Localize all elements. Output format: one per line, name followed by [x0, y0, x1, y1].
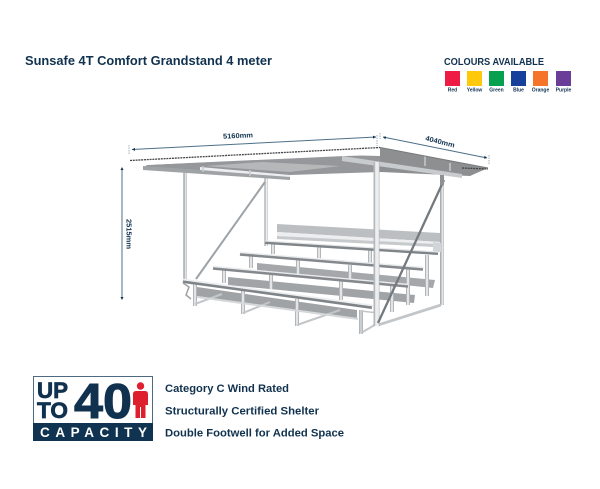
title: Sunsafe 4T Comfort Grandstand 4 meter	[25, 53, 272, 68]
base struts	[195, 294, 441, 333]
feature list	[165, 383, 344, 440]
swatch: orange: Orange	[532, 88, 549, 94]
dimension: depth 4040mm	[380, 133, 489, 165]
back frame posts and braces	[185, 172, 442, 305]
roof beams	[143, 156, 462, 180]
up: UP	[37, 378, 68, 403]
icon: person	[133, 382, 148, 418]
dimension: height 2515mm	[120, 167, 132, 300]
dimension: height 2515mm: 2515mm	[124, 219, 132, 249]
swatch: red: Red	[448, 88, 457, 94]
feature 2: Structurally Certified Shelter	[165, 406, 320, 418]
foot hardware	[183, 283, 191, 299]
roof sheet	[130, 147, 488, 169]
swatch: yellow: Yellow	[467, 88, 482, 94]
number 40: 40	[74, 375, 132, 429]
dimension: width 5160mm: 5160mm	[223, 132, 253, 141]
grandstand illustration	[130, 147, 488, 334]
swatch: purple: Purple	[556, 88, 571, 94]
feature 1: Category C Wind Rated	[165, 383, 289, 395]
to: TO	[37, 398, 68, 423]
dimension: width 5160mm	[129, 132, 377, 155]
swatch: blue: Blue	[513, 88, 524, 94]
bench legs and struts	[195, 243, 427, 334]
backrest	[277, 224, 441, 252]
dimension: depth 4040mm: 4040mm	[424, 135, 455, 150]
front posts and braces	[376, 162, 444, 326]
badge band	[33, 423, 153, 441]
roof underside	[143, 148, 488, 176]
colours available legend	[444, 57, 571, 94]
capacity badge	[33, 375, 153, 441]
feature 3: Double Footwell for Added Space	[165, 428, 344, 440]
seat rails	[183, 241, 438, 319]
capacity label: CAPACITY	[40, 425, 147, 440]
swatch: green: Green	[489, 88, 504, 94]
footboards	[197, 263, 435, 318]
bench leg highlights	[195, 243, 427, 334]
legend heading: COLOURS AVAILABLE	[444, 57, 544, 68]
